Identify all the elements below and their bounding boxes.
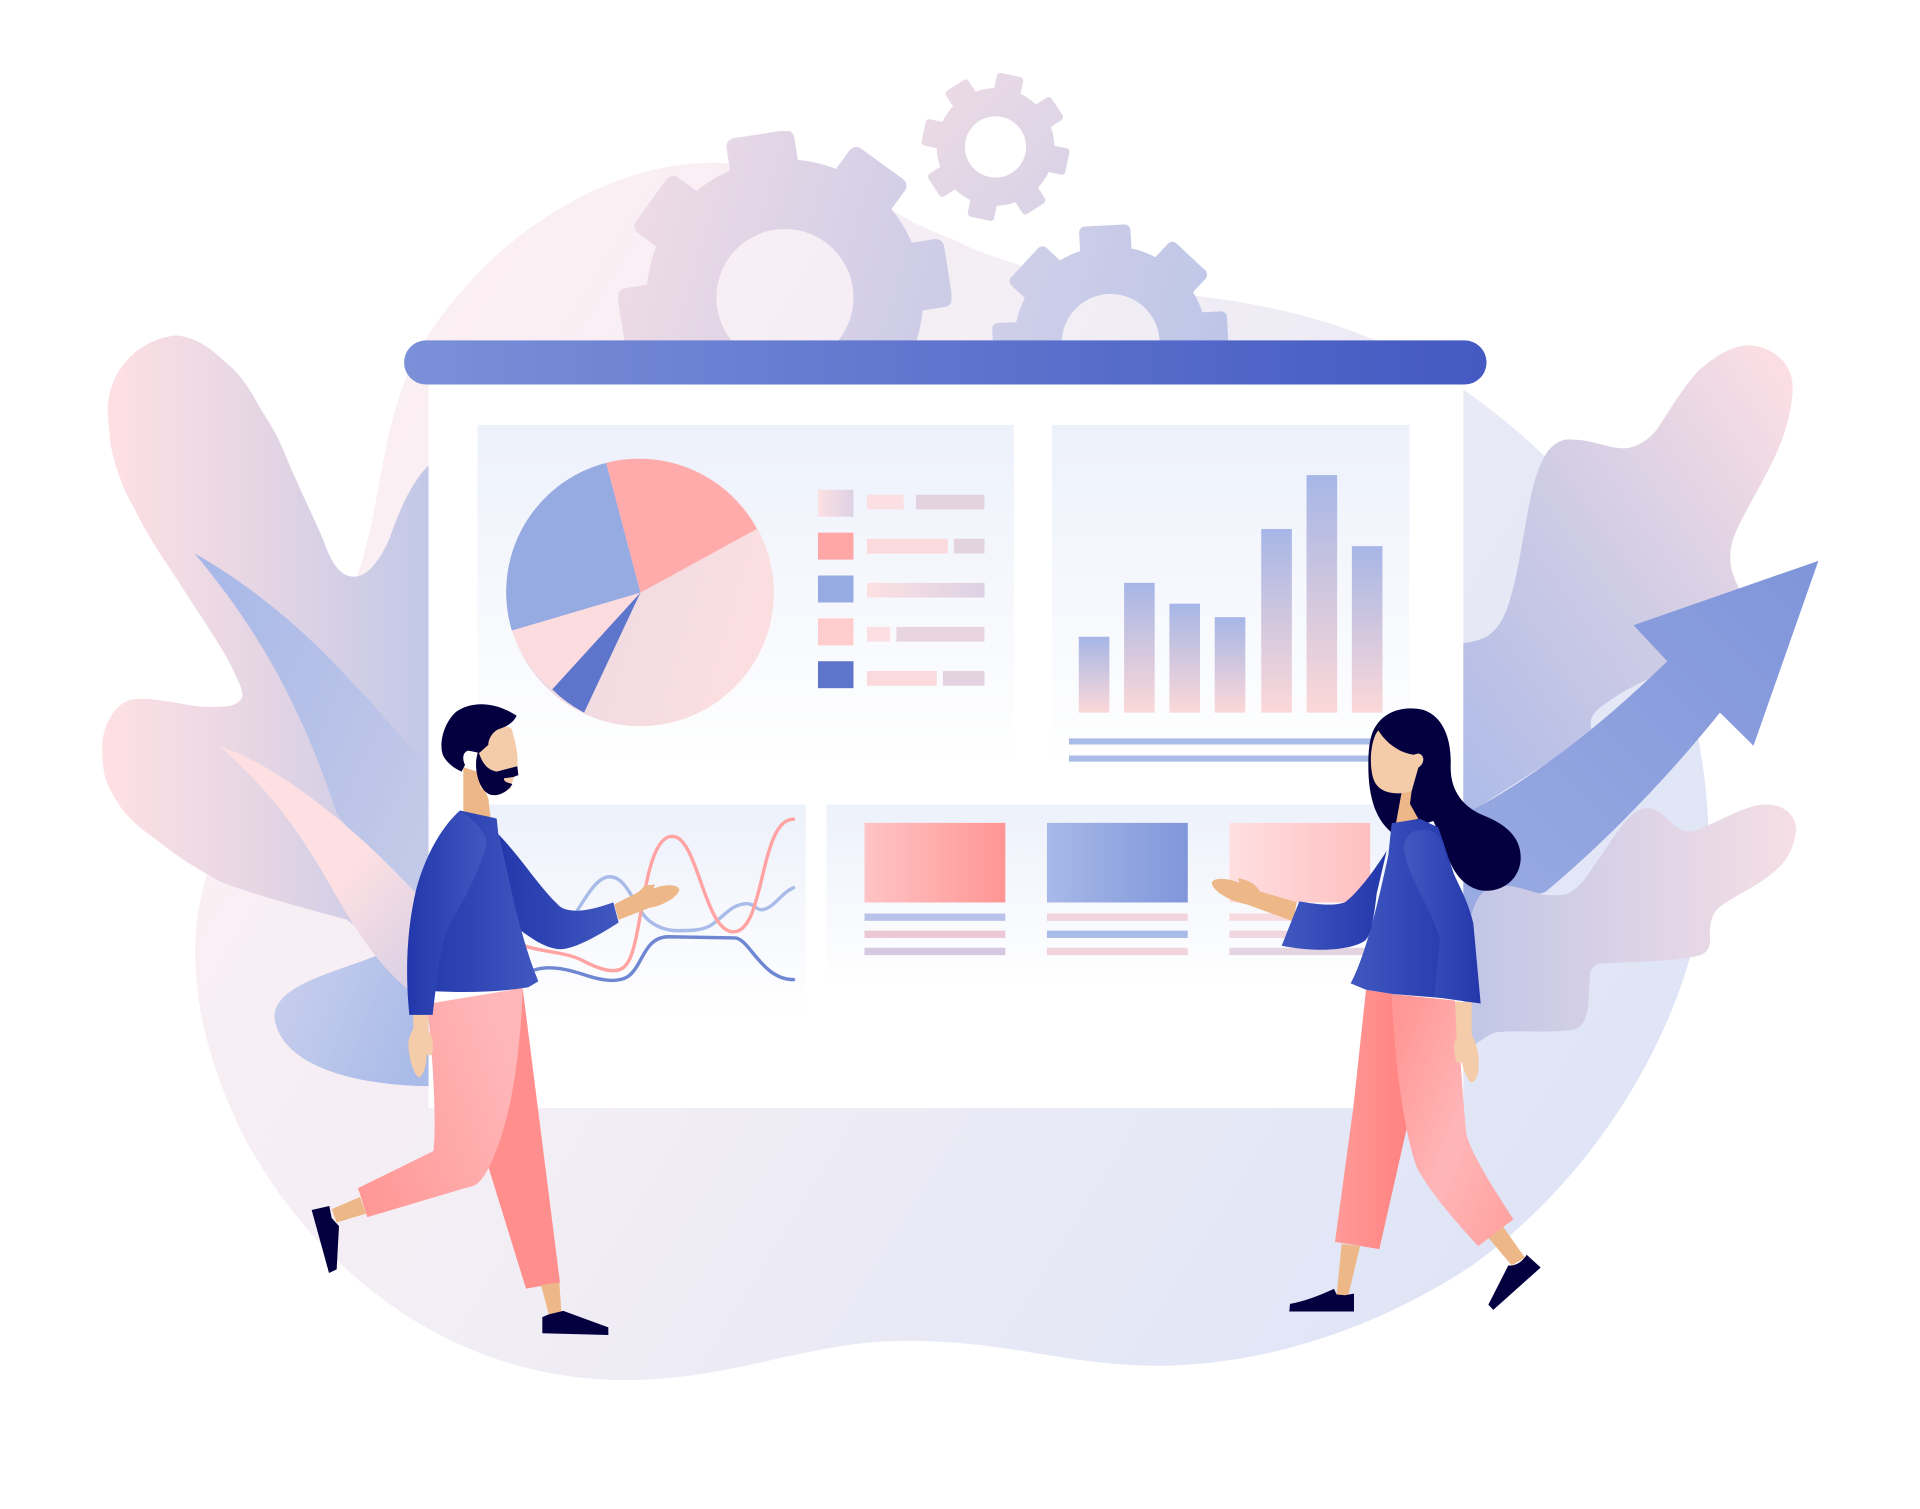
front shin	[1488, 1227, 1525, 1265]
man	[312, 704, 679, 1335]
lowered hand	[408, 1015, 433, 1077]
neck	[1396, 790, 1418, 823]
blue leaf	[195, 553, 429, 931]
lines	[523, 819, 793, 980]
right foliage	[1457, 345, 1818, 1053]
rear shoe	[1289, 1289, 1354, 1312]
rear sleeve	[1404, 830, 1481, 1003]
card 3	[1229, 823, 1370, 955]
panel background	[1052, 425, 1409, 768]
large pink leaf	[102, 336, 429, 980]
rear shin	[541, 1283, 562, 1316]
lilac leaf	[1457, 345, 1793, 820]
main scene	[102, 71, 1818, 1380]
card 2	[1047, 823, 1188, 955]
left foliage	[102, 336, 441, 1086]
panel background	[827, 804, 1396, 988]
panel: pie chart	[478, 425, 1014, 768]
neck	[463, 767, 491, 818]
hair	[441, 704, 517, 772]
panel: line chart	[490, 804, 806, 1019]
beard	[476, 752, 518, 795]
face	[477, 726, 518, 789]
front sleeve	[1282, 851, 1387, 950]
board	[404, 340, 1487, 1108]
front shoe	[312, 1206, 339, 1273]
icon: small gear	[920, 71, 1071, 223]
icon: medium gear	[992, 224, 1228, 340]
panel background	[478, 425, 1014, 768]
front sleeve	[498, 834, 619, 949]
lower lilac leaf	[1457, 804, 1796, 1053]
panel background	[490, 804, 806, 1019]
board surface	[429, 367, 1463, 1108]
forearm and hand	[1212, 878, 1297, 921]
caption lines	[1069, 738, 1375, 762]
front leg	[358, 988, 523, 1217]
panel: cards	[827, 804, 1396, 988]
woman	[1212, 708, 1541, 1312]
torso	[420, 810, 538, 992]
face	[1371, 730, 1423, 793]
rear leg	[1335, 990, 1407, 1249]
illustration	[102, 73, 1818, 1380]
icon: large gear	[618, 131, 952, 340]
forearm and hand	[614, 885, 679, 920]
lowered hand	[1454, 1001, 1479, 1082]
legend	[818, 490, 984, 688]
card 1	[864, 823, 1005, 955]
pink leaf	[219, 746, 429, 998]
rear shoe	[542, 1311, 608, 1335]
front leg	[1392, 994, 1513, 1246]
rear shin	[1337, 1244, 1360, 1295]
front shoe	[1488, 1255, 1541, 1310]
hair	[1368, 708, 1521, 891]
board top bar	[404, 340, 1487, 384]
panel: bar chart	[1052, 425, 1409, 768]
bars	[1079, 475, 1382, 713]
lower blue blob	[274, 955, 441, 1086]
front shin	[332, 1197, 366, 1223]
pie chart	[506, 459, 774, 726]
background blob	[195, 163, 1708, 1380]
arrow	[1457, 561, 1818, 918]
rear sleeve	[407, 810, 487, 1015]
torso	[1351, 819, 1463, 998]
rear leg	[488, 988, 560, 1289]
